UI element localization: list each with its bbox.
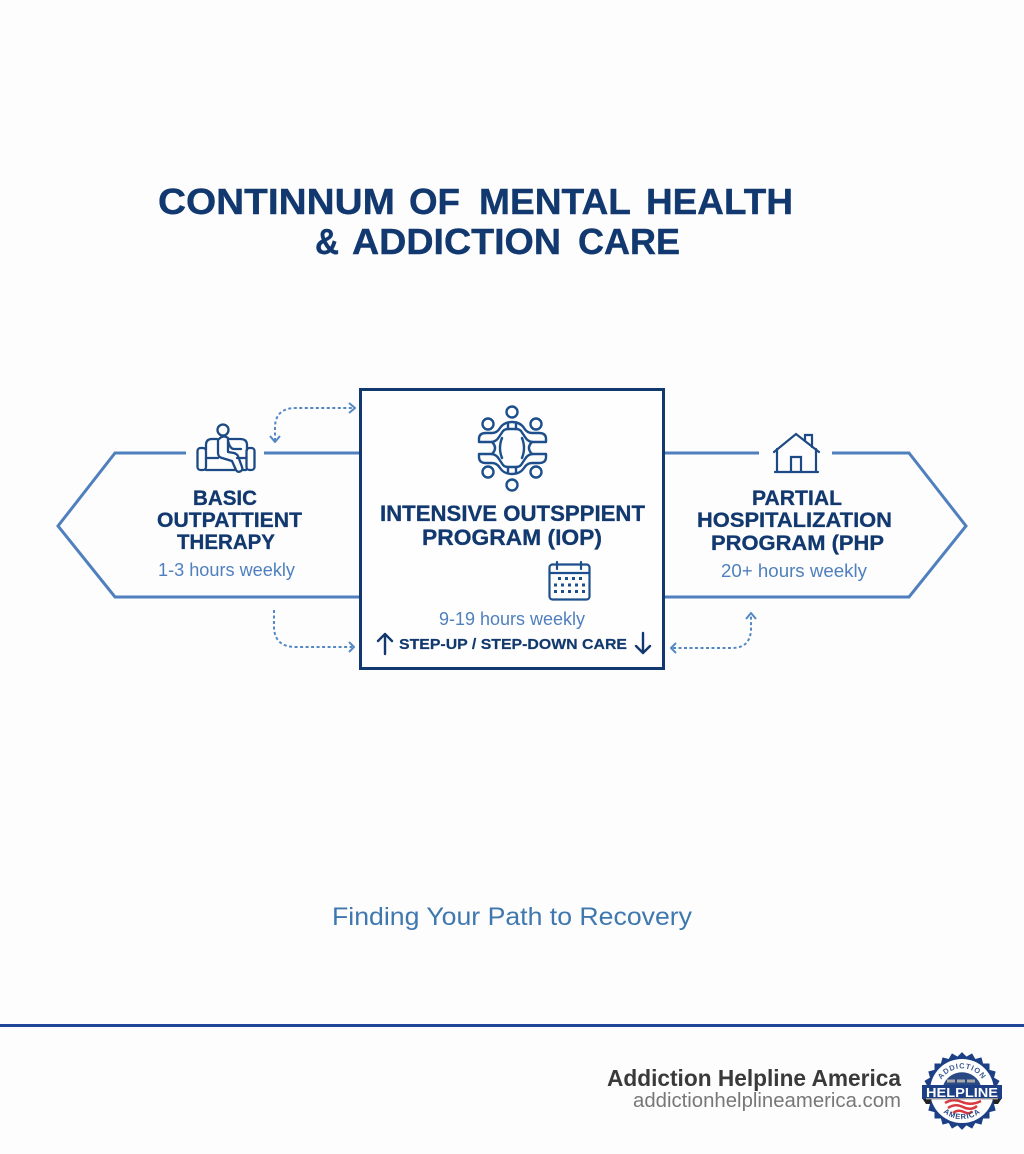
icon: house [774,434,819,472]
icon: up arrow [378,634,392,654]
icon: group circle [479,406,546,490]
title: CONTINNUM [158,181,395,222]
step-up / step-down row [378,633,650,654]
logo badge: AMERICA [943,1109,980,1120]
brand name: Addiction Helpline America [607,1065,901,1091]
heading: partial hospitalization program [697,487,892,555]
logo badge [922,1052,1002,1130]
hours: 20+ weekly: 20+ hours weekly [721,561,867,581]
panel: intensive outpatient program [360,390,664,668]
heading: partial hospitalization program: PROGRAM (PHP [711,532,884,555]
heading: intensive outpatient program [380,501,646,550]
title: ADDICTION [352,221,561,262]
arrow: bottom-right dashed [671,613,756,653]
title [158,181,793,262]
arrow: top-left dashed [270,403,355,442]
logo badge: HELPLINE [926,1085,998,1100]
title: HEALTH [646,181,793,222]
title: CARE [578,221,680,262]
title: MENTAL [479,181,631,222]
heading: basic outpatient therapy: OUTPATTIENT [157,509,302,532]
hours: 9-19 weekly: 9-19 hours weekly [439,609,585,629]
heading: intensive outpatient program: INTENSIVE OUTSPPIENT [380,501,646,526]
heading: partial hospitalization program: HOSPITALIZATION [697,509,892,532]
icon: person on couch [198,424,254,472]
hours: 1-3 weekly: 1-3 hours weekly [158,560,295,580]
heading: partial hospitalization program: PARTIAL [752,487,842,510]
panel: basic outpatient therapy [58,424,360,597]
icon: calendar [550,562,590,600]
icon: down arrow [636,633,650,653]
title: OF [409,181,460,222]
heading: basic outpatient therapy [157,487,302,554]
central box [360,390,664,668]
panel: partial hospitalization program [664,434,966,597]
arrow: bottom-left dashed [274,610,354,652]
website: addictionhelplineamerica.com [633,1090,901,1112]
heading: intensive outpatient program: PROGRAM (IOP) [422,525,602,550]
right arrow outline [664,453,966,597]
footer [0,1024,1024,1130]
title: & [315,221,339,262]
logo badge: ADDICTION [938,1063,986,1080]
heading: basic outpatient therapy: BASIC [193,487,257,510]
left arrow outline [58,453,360,597]
heading: basic outpatient therapy: THERAPY [177,531,275,554]
step label: STEP-UP / STEP-DOWN CARE [399,636,627,653]
footer rule [0,1024,1024,1027]
tagline: Finding Your Path to Recovery [332,903,693,931]
